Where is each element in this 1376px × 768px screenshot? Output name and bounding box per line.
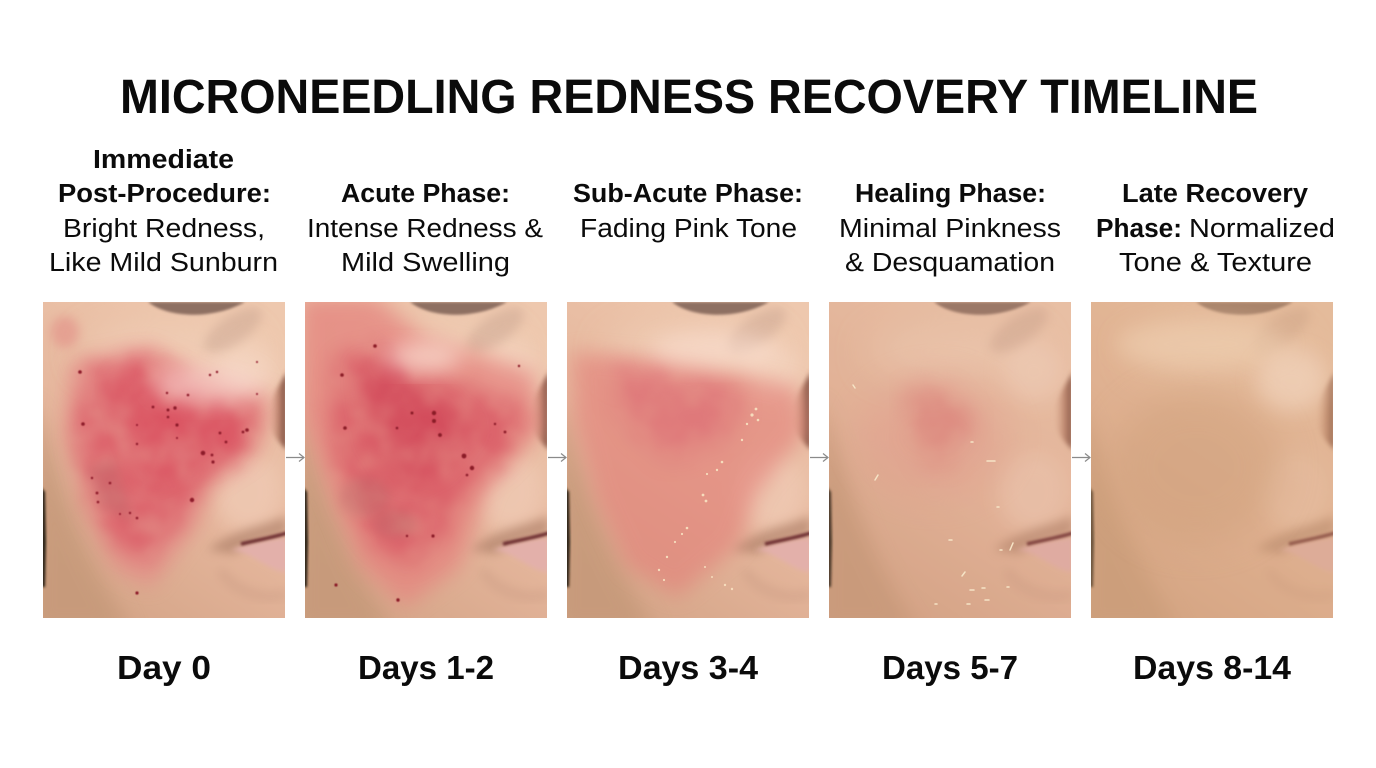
column: days 1-2 [295, 180, 549, 686]
heading: healing phase [839, 180, 1061, 277]
heading: sub-acute phase [573, 180, 803, 243]
heading: sub-acute phase: Sub-Acute Phase: [573, 180, 803, 208]
photo: fading pink tone with flakes [567, 302, 809, 618]
heading: immediate post-procedure: Bright Redness, [63, 215, 265, 243]
title: MICRONEEDLING REDNESS RECOVERY TIMELINE [120, 71, 1258, 124]
heading: late recovery phase: Phase: [1096, 215, 1182, 243]
heading: late recovery phase: Late Recovery [1122, 180, 1309, 208]
heading: healing phase: Minimal Pinkness [839, 215, 1061, 243]
photo: minimal pinkness with peeling flakes [829, 302, 1071, 618]
heading: immediate post-procedure [49, 146, 278, 277]
heading: late recovery phase [1096, 180, 1335, 277]
photo: intense redness and swelling [305, 302, 547, 618]
label: days 1-2: Days 1-2 [358, 649, 494, 686]
heading: immediate post-procedure: Immediate [93, 146, 234, 174]
heading: healing phase: Healing Phase: [855, 180, 1046, 208]
heading: acute phase: Intense Redness & [307, 215, 543, 243]
arrow: days 3-4 to days 5-7 [810, 454, 828, 462]
label: days 8-14: Days 8-14 [1133, 649, 1292, 686]
label: days 5-7: Days 5-7 [882, 649, 1018, 686]
label: day 0: Day 0 [117, 649, 211, 686]
photo: bright red cheek with blood spots [43, 302, 285, 618]
heading: acute phase [307, 180, 543, 277]
column: days 8-14 [1081, 180, 1335, 686]
heading: acute phase: Acute Phase: [341, 180, 510, 208]
arrow: days 5-7 to days 8-14 [1072, 454, 1090, 462]
column: days 5-7 [819, 180, 1073, 686]
heading: late recovery phase: Normalized [1189, 215, 1335, 243]
column: days 3-4 [557, 180, 811, 686]
heading: healing phase: & Desquamation [845, 249, 1055, 277]
arrow: days 1-2 to days 3-4 [548, 454, 566, 462]
heading: immediate post-procedure: Like Mild Sunburn [49, 249, 278, 277]
label: days 3-4: Days 3-4 [618, 649, 759, 686]
heading: sub-acute phase: Fading Pink Tone [580, 215, 797, 243]
photo: normalized tone and texture [1091, 302, 1333, 618]
heading: acute phase: Mild Swelling [341, 249, 510, 277]
heading: immediate post-procedure: Post-Procedure: [58, 180, 271, 208]
arrow: day 0 to days 1-2 [286, 454, 304, 462]
heading: late recovery phase: Tone & Texture [1119, 249, 1312, 277]
column: day 0 [33, 146, 287, 686]
